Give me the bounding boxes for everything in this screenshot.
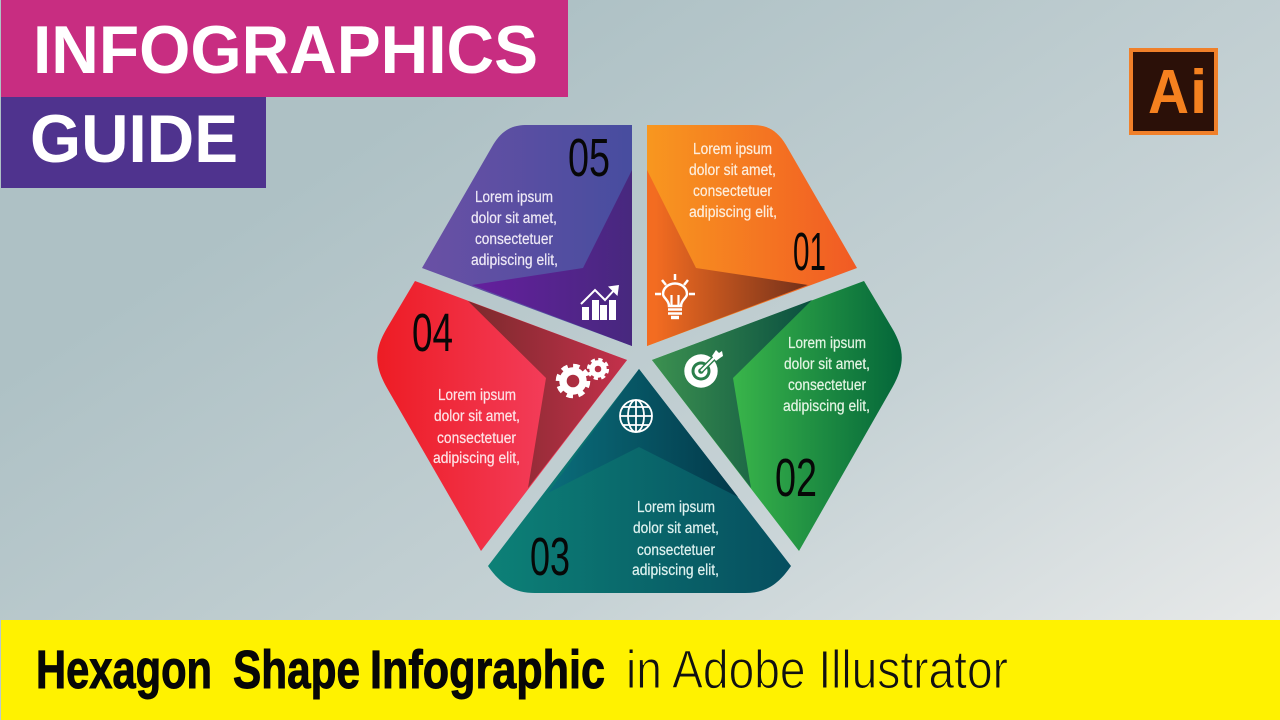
icon: growth chart: [581, 285, 619, 320]
segment 03 text: dolor sit amet,: [633, 520, 719, 537]
segment 04 text: adipiscing elit,: [433, 450, 520, 467]
panel: segment 03 teal: [488, 369, 791, 593]
footer subtitle light: in Adobe Illustrator: [626, 640, 1008, 700]
panel: segment 01 orange: [647, 125, 857, 346]
number 01: 01: [793, 222, 826, 282]
segment 05 dark fold: [472, 170, 632, 346]
number 03: 03: [530, 527, 570, 587]
footer title bold: Hexagon: [36, 640, 212, 700]
segment 05 text: [471, 189, 558, 269]
header banner: GUIDE: GUIDE: [30, 101, 238, 177]
segment 03 text: adipiscing elit,: [632, 562, 719, 579]
segment 04 shape: [377, 281, 627, 551]
segment 05 text: Lorem ipsum: [475, 189, 553, 206]
segment 05 text: consectetuer: [475, 231, 553, 248]
segment 04 text: [433, 387, 520, 467]
icon: globe: [620, 400, 652, 432]
segment 04 text: consectetuer: [437, 430, 516, 447]
segment 02 text: adipiscing elit,: [783, 398, 870, 415]
segment 01 text: adipiscing elit,: [689, 204, 777, 221]
segment 01 text: consectetuer: [693, 183, 772, 200]
segment 05 text: dolor sit amet,: [471, 210, 557, 227]
header banner: INFOGRAPHICS: INFOGRAPHICS: [33, 12, 538, 88]
segment 02 dark fold: [652, 300, 812, 488]
icon: gears: [558, 359, 608, 396]
segment 01 text: dolor sit amet,: [689, 162, 776, 179]
panel: segment 05 purple: [422, 125, 632, 346]
segment 02 shape: [652, 281, 902, 551]
segment 04 text: dolor sit amet,: [434, 408, 520, 425]
segment 04 text: Lorem ipsum: [438, 387, 516, 404]
segment 05 shape: [422, 125, 632, 346]
footer title bold: Shape: [233, 640, 360, 700]
footer bar: [1, 620, 1280, 720]
segment 01 text: [689, 141, 777, 221]
segment 01 shape: [647, 125, 857, 346]
segment 01 text: Lorem ipsum: [693, 141, 772, 158]
header banner: GUIDE: [1, 97, 266, 188]
segment 02 text: [783, 335, 870, 415]
segment 03 text: Lorem ipsum: [637, 499, 715, 516]
segment 03 text: [632, 499, 719, 579]
segment 03 text: consectetuer: [637, 542, 715, 559]
Adobe Illustrator logo: [1131, 50, 1216, 133]
segment 02 text: consectetuer: [788, 377, 866, 394]
segment 03 dark fold: [548, 369, 738, 497]
segment 04 dark fold: [468, 301, 627, 488]
Adobe Illustrator logo: i: [1190, 58, 1207, 127]
segment 02 text: Lorem ipsum: [788, 335, 866, 352]
icon: light bulb: [655, 274, 695, 318]
segment 01 dark fold: [647, 170, 808, 346]
segment 05 text: adipiscing elit,: [471, 252, 558, 269]
segment 02 text: dolor sit amet,: [784, 356, 870, 373]
footer title bold: Infographic: [370, 640, 605, 700]
number 05: 05: [568, 128, 610, 188]
number 02: 02: [775, 448, 817, 508]
panel: segment 04 red: [377, 281, 627, 551]
segment 03 shape: [488, 369, 791, 593]
Adobe Illustrator logo: A: [1148, 58, 1189, 127]
panel: segment 02 green: [652, 281, 902, 551]
number 04: 04: [412, 303, 453, 363]
icon: target with arrow: [684, 350, 723, 388]
footer title bold: [36, 640, 605, 700]
